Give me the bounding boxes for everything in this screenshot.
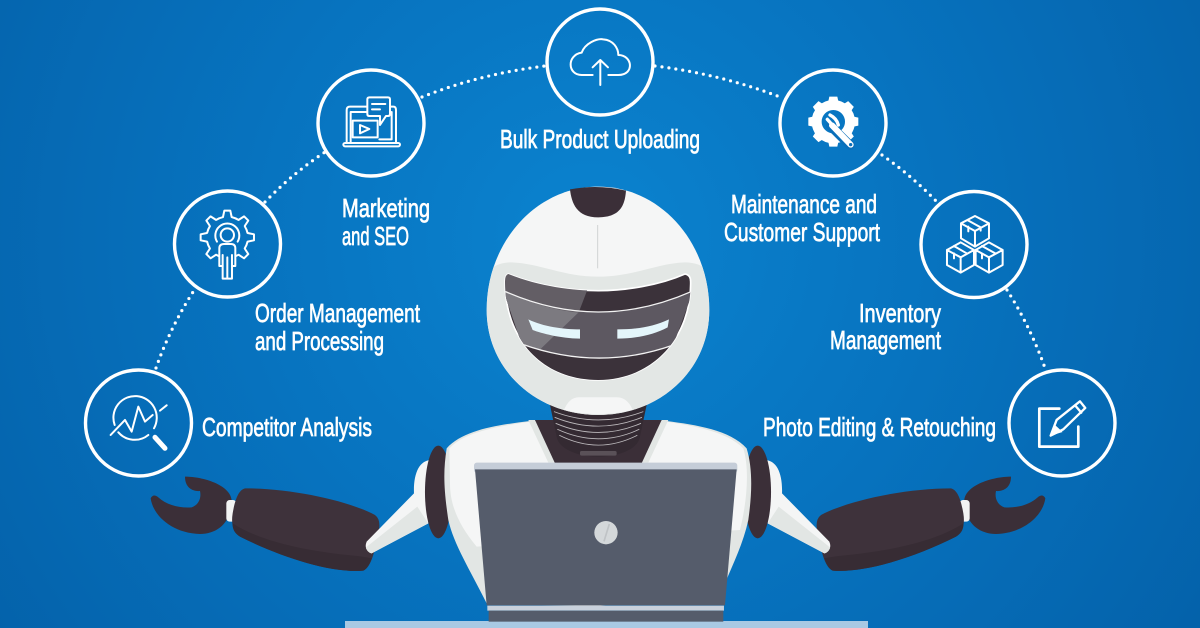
service: order management and processing — [174, 191, 421, 356]
service: photo editing and retouching — [763, 370, 1115, 476]
label: marketing and SEO: and SEO — [342, 221, 409, 251]
robot — [151, 187, 1045, 622]
head — [483, 187, 713, 420]
eye: right — [617, 319, 669, 339]
label: order management and processing — [255, 298, 421, 356]
service: bulk product uploading — [500, 9, 700, 154]
label: maintenance and customer support: Customer Support — [724, 217, 881, 247]
label: order management and processing: Order Management — [255, 298, 421, 328]
chin plate — [564, 397, 633, 414]
icon: gear with wrench — [780, 70, 886, 176]
left arm — [151, 446, 452, 571]
right shoulder cone — [764, 460, 830, 553]
label: marketing and SEO: Marketing — [342, 193, 430, 223]
label: order management and processing: and Processing — [255, 326, 384, 356]
icon: gear with person — [174, 191, 280, 297]
left hand — [151, 477, 232, 534]
laptop logo — [594, 521, 618, 544]
dotted arc connecting the service icons — [156, 66, 1045, 368]
icon: stacked boxes — [921, 192, 1027, 298]
torso — [444, 421, 751, 607]
label: maintenance and customer support — [724, 189, 881, 247]
right hand — [964, 477, 1045, 534]
head cap — [570, 187, 626, 217]
service: marketing and SEO — [318, 70, 430, 251]
service: maintenance and customer support — [724, 70, 886, 247]
icon: laptop with video and chat — [318, 70, 424, 176]
label: inventory management: Inventory — [859, 298, 941, 328]
label: inventory management — [830, 298, 942, 355]
label: photo editing and retouching: Photo Editing & Retouching — [763, 412, 996, 442]
right forearm — [817, 488, 964, 571]
desk edge — [345, 621, 868, 628]
left shoulder cone — [366, 460, 432, 553]
icon: cloud upload — [547, 9, 653, 115]
laptop — [474, 463, 737, 622]
right arm — [744, 446, 1045, 571]
icon: pencil on square — [1009, 370, 1115, 476]
neck and collar — [528, 405, 668, 463]
label: marketing and SEO — [342, 193, 430, 251]
label: maintenance and customer support: Maintenance and — [731, 189, 877, 219]
label: bulk product uploading: Bulk Product Uploading — [500, 124, 700, 154]
left forearm — [232, 488, 379, 571]
eye: left — [528, 319, 580, 339]
service: inventory management — [830, 192, 1027, 355]
label: competitor analysis: Competitor Analysis — [202, 412, 372, 442]
service: competitor analysis — [86, 370, 372, 476]
visor — [503, 270, 693, 387]
label: inventory management: Management — [830, 325, 942, 355]
icon: magnifier with chart line — [86, 370, 192, 476]
